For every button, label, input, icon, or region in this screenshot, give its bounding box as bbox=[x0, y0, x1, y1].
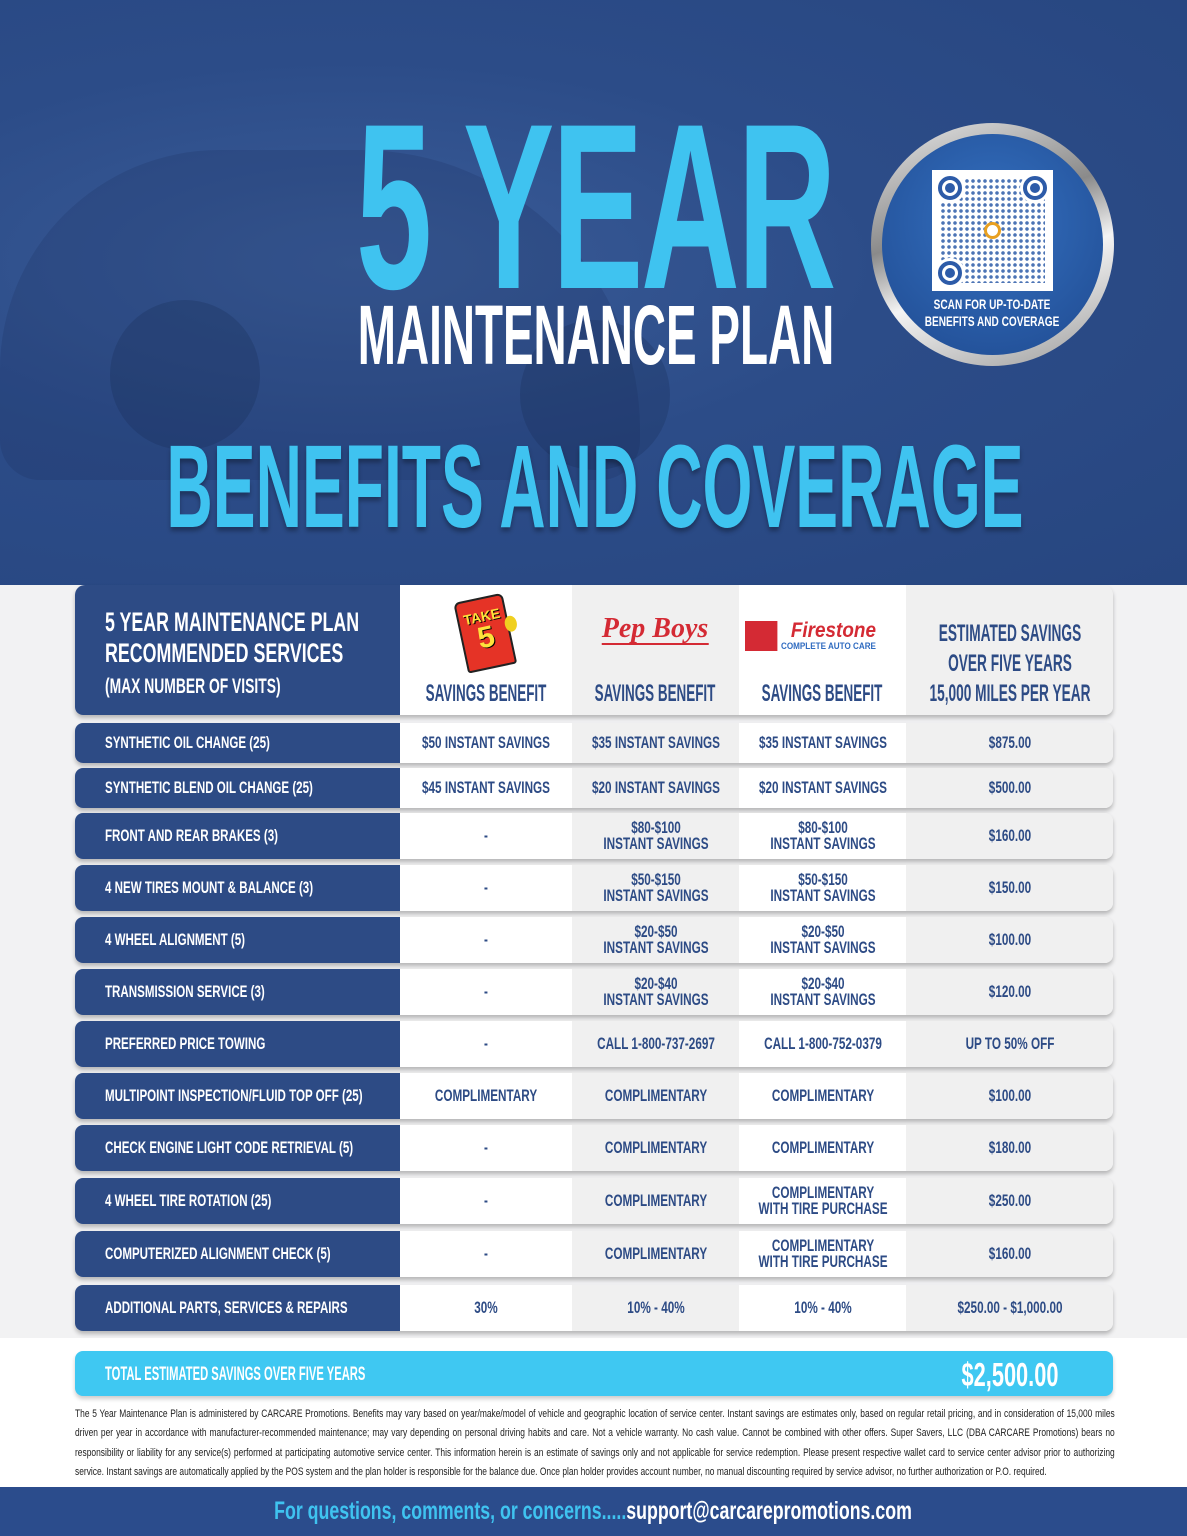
footer bbox=[0, 1487, 1187, 1536]
row: synthetic blend: SYNTHETIC BLEND OIL CHANGE (25) bbox=[105, 778, 313, 797]
row: synthetic blend bbox=[75, 768, 1113, 808]
header: Pep Boys: SAVINGS BENEFIT bbox=[595, 680, 715, 707]
header: services bbox=[75, 585, 400, 715]
header: estimated savings: ESTIMATED SAVINGS bbox=[939, 620, 1081, 647]
row: check engine: COMPLIMENTARY bbox=[604, 1138, 707, 1157]
row: alignment: INSTANT SAVINGS bbox=[603, 938, 708, 957]
row: towing bbox=[75, 1021, 1113, 1067]
row: transmission: TRANSMISSION SERVICE (3) bbox=[105, 982, 265, 1001]
header: Take 5: SAVINGS BENEFIT bbox=[426, 680, 546, 707]
row: alignment bbox=[75, 917, 1113, 963]
header: services: 5 YEAR MAINTENANCE PLAN bbox=[105, 607, 359, 637]
row: brakes: $160.00 bbox=[988, 826, 1031, 845]
row: synthetic oil bbox=[75, 723, 1113, 763]
row: towing: - bbox=[484, 1034, 488, 1053]
row: additional parts: 10% - 40% bbox=[794, 1298, 851, 1317]
row: additional parts: $250.00 - $1,000.00 bbox=[957, 1298, 1062, 1317]
row: additional parts: 30% bbox=[474, 1298, 498, 1317]
title: 5 YEAR: 5 YEAR bbox=[356, 75, 834, 339]
header: services: (MAX NUMBER OF VISITS) bbox=[105, 675, 281, 698]
row: synthetic oil: $35 INSTANT SAVINGS bbox=[759, 733, 886, 752]
row: alignment check: - bbox=[484, 1244, 488, 1263]
row: brakes: - bbox=[484, 826, 488, 845]
footer: For questions, comments, or concerns.....support@carcarepromotions.com bbox=[274, 1497, 912, 1525]
disclaimer: The 5 Year Maintenance Plan is administered by CARCARE Promotions. Benefits may vary based on year/make/model of vehicle and geographic location of service center. Instant savings are estimates only, based on regular retail pricing, and in consideration of 15,000 miles driven per year in accordance with manufacturer-recommended maintenance; may vary depending on personal driving habits and care. Not a vehicle warranty. No cash value. Cannot be combined with other offers. Super Savers, LLC (DBA CARCARE Promotions) bears no responsibility or liability for any service(s) performed at participating automotive service center. This information herein is an estimate of savings only and not applicable for service redemption. Please present respective wallet card to service center advisor prior to authorizing service. Instant savings are automatically applied by the POS system and the plan holder is responsible for the balance due. Once plan holder provides account number, no manual discounting required by service advisor, no further authorization or P.O. required. bbox=[75, 1408, 1115, 1478]
row: alignment check: COMPLIMENTARY bbox=[604, 1244, 707, 1263]
row: additional parts: ADDITIONAL PARTS, SERVICES & REPAIRS bbox=[105, 1298, 348, 1317]
row: tires: 4 NEW TIRES MOUNT & BALANCE (3) bbox=[105, 878, 313, 897]
QR caption: SCAN FOR UP-TO-DATE bbox=[934, 296, 1050, 312]
row: rotation: - bbox=[484, 1191, 488, 1210]
QR badge bbox=[871, 123, 1114, 366]
header: Take 5: TAKE bbox=[462, 605, 501, 628]
heading: BENEFITS AND COVERAGE: BENEFITS AND COVERAGE bbox=[166, 421, 1024, 553]
row: synthetic oil: $35 INSTANT SAVINGS bbox=[592, 733, 719, 752]
row: tires: INSTANT SAVINGS bbox=[770, 886, 875, 905]
row: towing: UP TO 50% OFF bbox=[965, 1034, 1054, 1053]
row: alignment check: $160.00 bbox=[988, 1244, 1031, 1263]
row: inspection bbox=[75, 1073, 1113, 1119]
header: Pep Boys bbox=[572, 585, 739, 715]
row: transmission: INSTANT SAVINGS bbox=[770, 990, 875, 1009]
row: transmission bbox=[75, 969, 1113, 1015]
row: inspection: COMPLIMENTARY bbox=[435, 1086, 537, 1105]
row: inspection: COMPLIMENTARY bbox=[771, 1086, 874, 1105]
row: check engine: $180.00 bbox=[988, 1138, 1031, 1157]
row: brakes: INSTANT SAVINGS bbox=[603, 834, 708, 853]
row: rotation: 4 WHEEL TIRE ROTATION (25) bbox=[105, 1191, 271, 1210]
row: synthetic blend: $20 INSTANT SAVINGS bbox=[592, 778, 719, 797]
row: alignment check: COMPUTERIZED ALIGNMENT CHECK (5) bbox=[105, 1244, 331, 1263]
row: inspection: COMPLIMENTARY bbox=[604, 1086, 707, 1105]
row: alignment: - bbox=[484, 930, 488, 949]
row: rotation: COMPLIMENTARY bbox=[604, 1191, 707, 1210]
row: check engine: - bbox=[484, 1138, 488, 1157]
total bar bbox=[75, 1351, 1113, 1396]
total bar: $2,500.00 bbox=[962, 1356, 1058, 1393]
header: Pep Boys: Pep Boys bbox=[602, 613, 708, 644]
row: additional parts bbox=[75, 1285, 1113, 1331]
header: estimated savings bbox=[906, 585, 1113, 715]
total bar: TOTAL ESTIMATED SAVINGS OVER FIVE YEARS bbox=[105, 1364, 365, 1385]
table header bbox=[75, 585, 1113, 715]
row: alignment check: WITH TIRE PURCHASE bbox=[758, 1252, 887, 1271]
row: synthetic blend: $500.00 bbox=[988, 778, 1031, 797]
header: Take 5 bbox=[400, 585, 572, 715]
QR caption: BENEFITS AND COVERAGE bbox=[925, 313, 1059, 329]
row: brakes: FRONT AND REAR BRAKES (3) bbox=[105, 826, 278, 845]
row: towing: PREFERRED PRICE TOWING bbox=[105, 1034, 265, 1053]
header: Take 5: 5 bbox=[475, 620, 498, 655]
row: brakes: $80-$100 bbox=[631, 818, 680, 837]
row: transmission: $20-$40 bbox=[801, 974, 844, 993]
header: Firestone: SAVINGS BENEFIT bbox=[762, 680, 882, 707]
header: estimated savings: 15,000 MILES PER YEAR bbox=[930, 680, 1090, 707]
row: brakes: INSTANT SAVINGS bbox=[770, 834, 875, 853]
row: transmission: $20-$40 bbox=[634, 974, 677, 993]
row: towing: CALL 1-800-737-2697 bbox=[597, 1034, 714, 1053]
row: tires: - bbox=[484, 878, 488, 897]
row: transmission: INSTANT SAVINGS bbox=[603, 990, 708, 1009]
row: tires: INSTANT SAVINGS bbox=[603, 886, 708, 905]
row: inspection: MULTIPOINT INSPECTION/FLUID TOP OFF (25) bbox=[105, 1086, 363, 1105]
row: synthetic oil: SYNTHETIC OIL CHANGE (25) bbox=[105, 733, 270, 752]
row: brakes bbox=[75, 813, 1113, 859]
row: synthetic blend: $45 INSTANT SAVINGS bbox=[422, 778, 550, 797]
QR caption bbox=[925, 296, 1059, 329]
row: transmission: $120.00 bbox=[988, 982, 1031, 1001]
icon: QR code bbox=[932, 170, 1053, 291]
row: additional parts: 10% - 40% bbox=[627, 1298, 684, 1317]
row: tires: $150.00 bbox=[988, 878, 1031, 897]
row: rotation bbox=[75, 1178, 1113, 1224]
row: rotation: WITH TIRE PURCHASE bbox=[758, 1199, 887, 1218]
header: Firestone bbox=[739, 585, 906, 715]
row: check engine bbox=[75, 1125, 1113, 1171]
row: towing: CALL 1-800-752-0379 bbox=[764, 1034, 881, 1053]
row: tires bbox=[75, 865, 1113, 911]
row: inspection: $100.00 bbox=[988, 1086, 1031, 1105]
row: tires: $50-$150 bbox=[631, 870, 680, 889]
row: rotation: $250.00 bbox=[988, 1191, 1031, 1210]
row: alignment: 4 WHEEL ALIGNMENT (5) bbox=[105, 930, 245, 949]
row: synthetic oil: $50 INSTANT SAVINGS bbox=[422, 733, 550, 752]
row: synthetic blend: $20 INSTANT SAVINGS bbox=[759, 778, 886, 797]
row: tires: $50-$150 bbox=[798, 870, 847, 889]
row: alignment: $20-$50 bbox=[634, 922, 677, 941]
subtitle: MAINTENANCE PLAN: MAINTENANCE PLAN bbox=[358, 288, 834, 382]
row: alignment check bbox=[75, 1231, 1113, 1277]
header: Firestone: Firestone bbox=[791, 619, 876, 642]
header: Firestone: COMPLETE AUTO CARE bbox=[781, 641, 876, 651]
row: alignment: INSTANT SAVINGS bbox=[770, 938, 875, 957]
row: alignment: $100.00 bbox=[988, 930, 1031, 949]
hero background bbox=[0, 0, 1187, 585]
header: estimated savings: OVER FIVE YEARS bbox=[948, 650, 1072, 677]
row: check engine: COMPLIMENTARY bbox=[771, 1138, 874, 1157]
row: check engine: CHECK ENGINE LIGHT CODE RETRIEVAL (5) bbox=[105, 1138, 353, 1157]
row: alignment check: COMPLIMENTARY bbox=[771, 1236, 874, 1255]
white lower area bbox=[0, 1338, 1187, 1488]
row: transmission: - bbox=[484, 982, 488, 1001]
header: services: RECOMMENDED SERVICES bbox=[105, 638, 343, 668]
row: synthetic oil: $875.00 bbox=[988, 733, 1031, 752]
row: brakes: $80-$100 bbox=[798, 818, 847, 837]
row: alignment: $20-$50 bbox=[801, 922, 844, 941]
row: rotation: COMPLIMENTARY bbox=[771, 1183, 874, 1202]
